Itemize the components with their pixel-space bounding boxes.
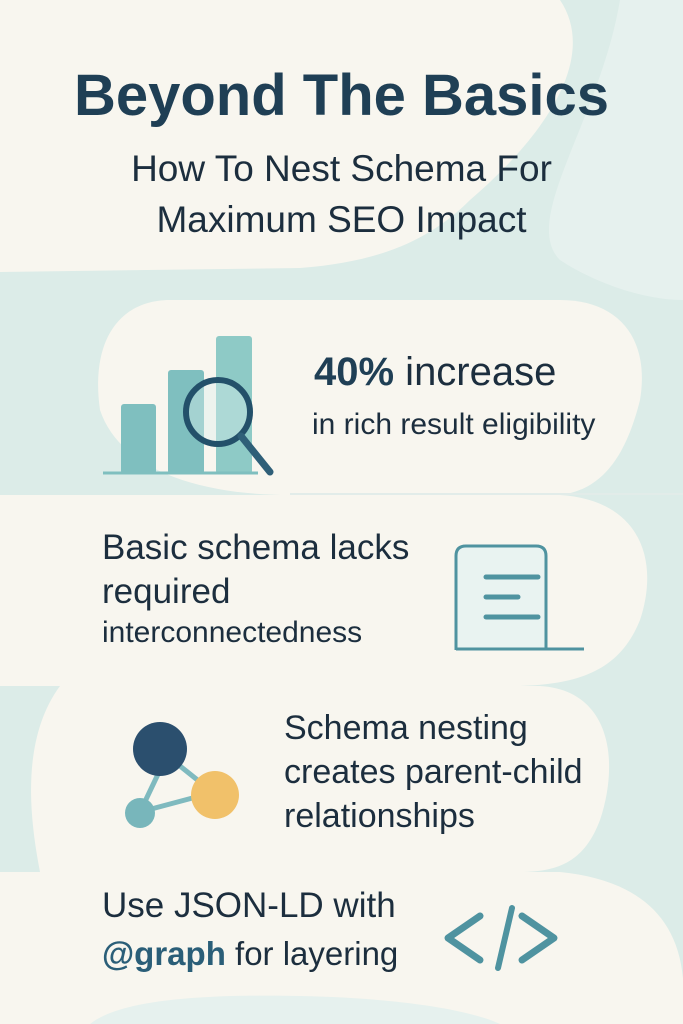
text: Use JSON-LD with [102, 886, 396, 925]
text: required [102, 572, 230, 611]
icon: network nodes [125, 722, 239, 828]
text: @graph for layering [102, 935, 398, 972]
icon: document [454, 544, 584, 650]
text: creates parent-child [284, 753, 583, 791]
panel: basic schema: interconnectedness [102, 616, 362, 649]
text [102, 886, 398, 972]
subtitle: How To Nest Schema For [131, 148, 552, 189]
panel: basic schema [102, 528, 584, 650]
stat text: 40% increase [314, 350, 556, 394]
panel: 40% increase [103, 336, 596, 476]
panel: schema nesting [125, 709, 583, 835]
icon: code brackets [444, 905, 558, 971]
text [102, 528, 409, 611]
text: relationships [284, 797, 475, 835]
text [284, 709, 583, 835]
icon: bar chart with magnifier [103, 336, 274, 476]
panel: JSON-LD [102, 886, 558, 972]
title: Beyond The Basics [74, 63, 609, 128]
subtitle [131, 148, 552, 240]
subtitle: Maximum SEO Impact [156, 199, 527, 240]
text: Schema nesting [284, 709, 528, 747]
text: Basic schema lacks [102, 528, 409, 567]
panel: 40% increase: in rich result eligibility [312, 408, 595, 441]
